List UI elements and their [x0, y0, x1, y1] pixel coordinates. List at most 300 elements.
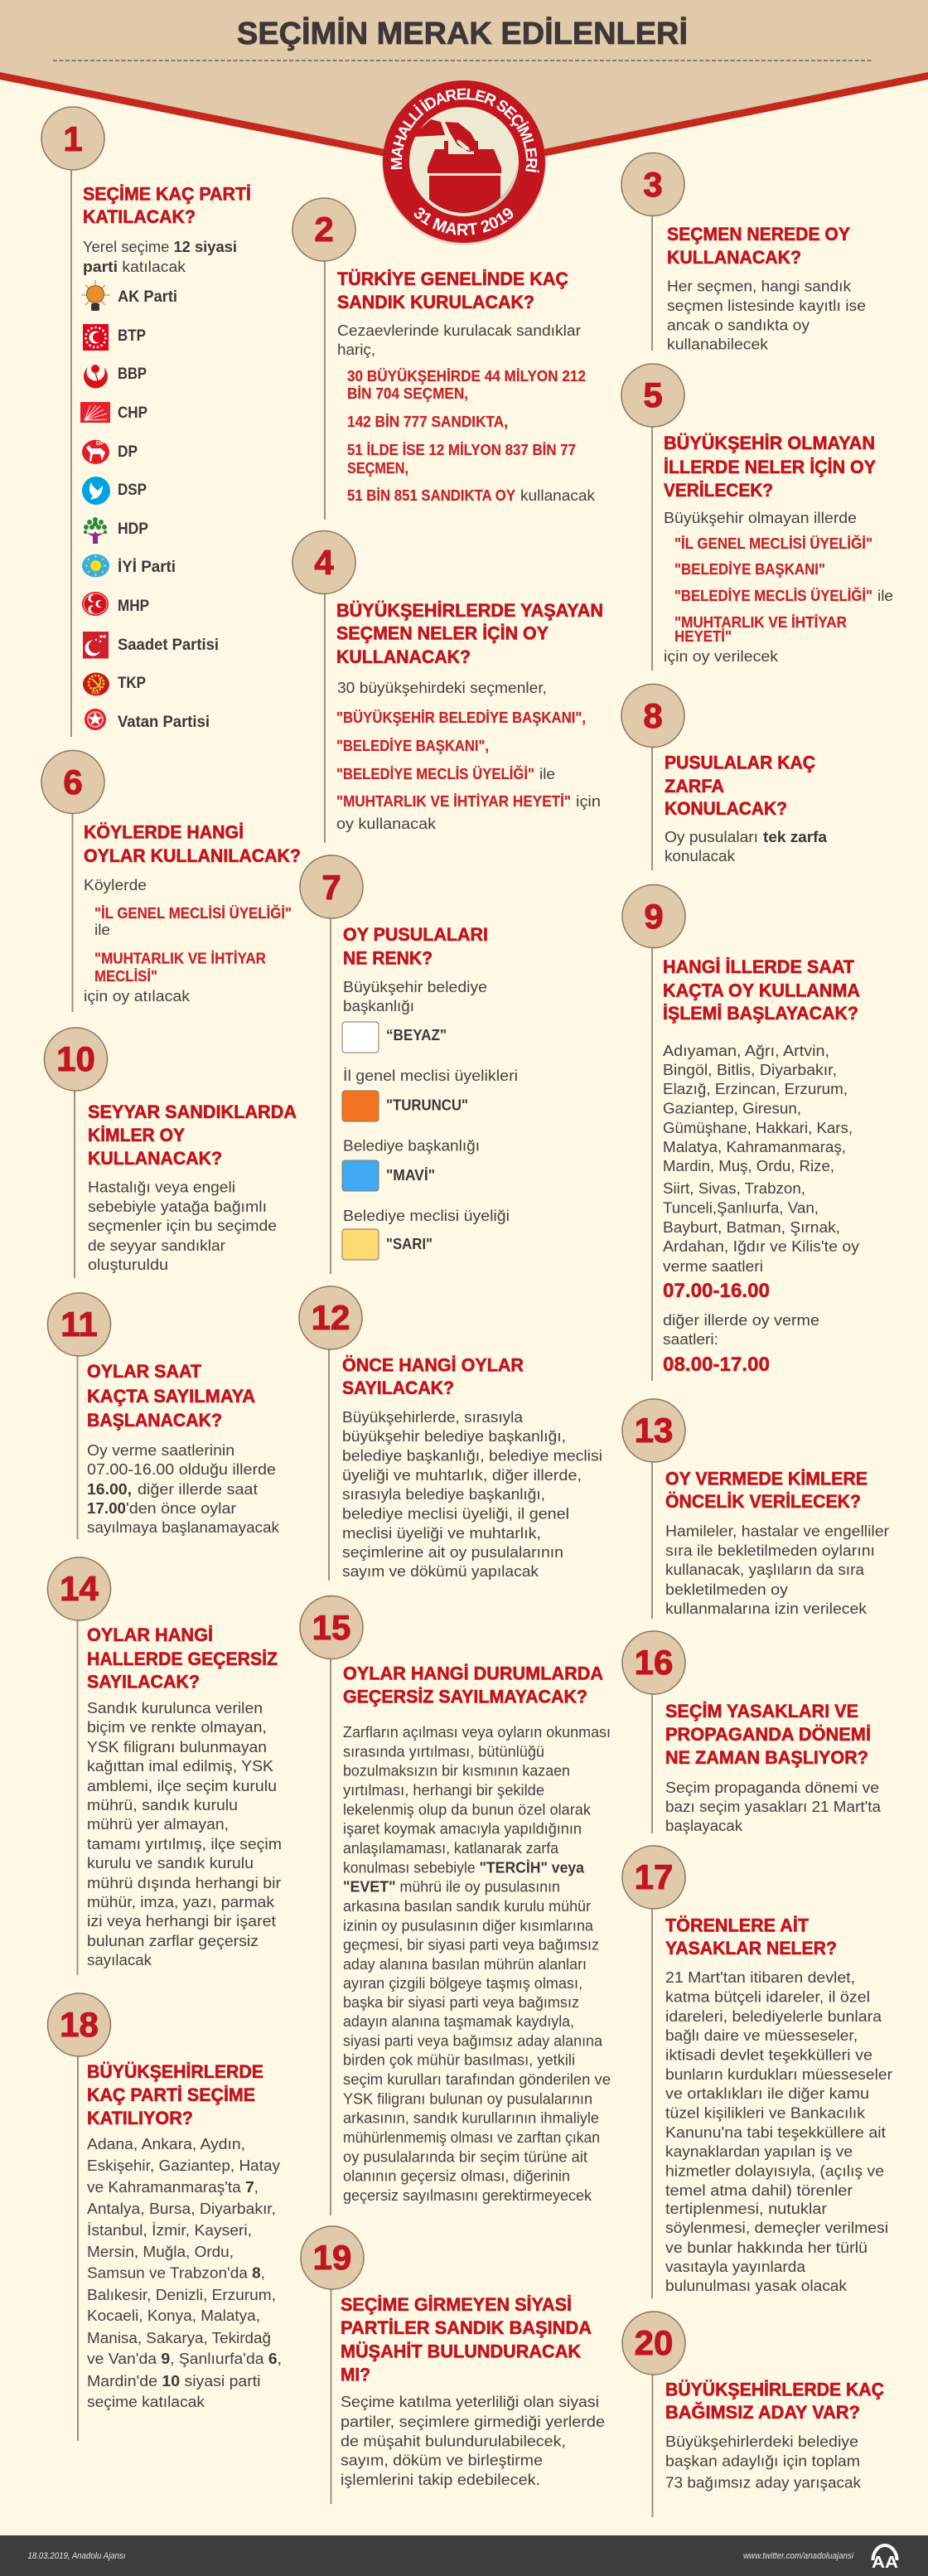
- text 18: Samsun ve Trabzon'da 8,: [87, 2264, 265, 2281]
- party: BTP: [83, 324, 146, 351]
- heading 12: ÖNCE HANGİ OYLAR: [342, 1354, 524, 1376]
- text 10: Hastalığı veya engeli: [88, 1179, 235, 1195]
- number badge 19: [301, 2226, 364, 2289]
- heading 19: SEÇİME GİRMEYEN SİYASİ: [341, 2294, 572, 2315]
- text 17: bağlı daire ve müesseseler,: [665, 2027, 858, 2044]
- text 17: kaynaklardan yapılan iş ve: [665, 2143, 853, 2160]
- text 8: tek zarfa: [763, 829, 828, 845]
- text 9: Mardin, Muş, Ordu, Rize,: [663, 1158, 834, 1174]
- number badge 10: [45, 1028, 108, 1091]
- text 15: Zarfların açılması veya oyların okunması: [343, 1724, 611, 1741]
- header banner: [0, 0, 928, 172]
- text 19: de müşahit bulundurulabilecek,: [341, 2433, 566, 2450]
- swatch: white: [342, 1022, 447, 1053]
- number badge 7: [300, 855, 363, 918]
- text 14: mührü, sandık kurulu: [87, 1797, 238, 1813]
- text 18: Eskişehir, Gaziantep, Hatay: [87, 2157, 280, 2174]
- heading 10: KİMLER OY: [88, 1125, 185, 1145]
- swatch: blue: [342, 1160, 435, 1191]
- text 15: seçim kurulları tarafından gönderilen ve: [343, 2071, 611, 2088]
- party: HDP: [84, 517, 148, 544]
- text 18: Manisa, Sakarya, Tekirdağ: [87, 2330, 271, 2346]
- text 2: 142 BİN 777 SANDIKTA,: [347, 414, 508, 430]
- text 15: bozulmaksızın bir kısmının kazaen: [343, 1762, 570, 1779]
- text 6: MECLİSİ": [94, 968, 157, 985]
- number badge 5: 5: [643, 375, 663, 414]
- heading 2: TÜRKİYE GENELİNDE KAÇ: [337, 269, 568, 289]
- text 3: kullanabilecek: [667, 337, 769, 353]
- text 9: Adıyaman, Ağrı, Artvin,: [663, 1043, 829, 1059]
- number badge 3: [621, 153, 684, 215]
- heading 15: GEÇERSİZ SAYILMAYACAK?: [343, 1686, 587, 1707]
- text 15: sırasında yırtılması, bütünlüğü: [343, 1744, 544, 1760]
- text 10: oluşturuldu: [88, 1257, 168, 1273]
- text 4: "MUHTARLIK VE İHTİYAR HEYETİ": [336, 793, 571, 810]
- heading 9: KAÇTA OY KULLANMA: [663, 980, 860, 1001]
- swatch: blue: "MAVİ": [386, 1167, 435, 1184]
- heading 19: PARTİLER SANDIK BAŞINDA: [341, 2317, 592, 2338]
- text 9: Elazığ, Erzincan, Erzurum,: [663, 1081, 848, 1097]
- text 10: de seyyar sandıklar: [88, 1237, 225, 1254]
- text 12: üyeliği ve muhtarlık, diğer illerde,: [342, 1467, 582, 1484]
- title: SEÇİMİN MERAK EDİLENLERİ: [237, 17, 688, 51]
- heading 3: [667, 224, 850, 268]
- party: DSP: [82, 477, 147, 505]
- party: Saadet: [83, 632, 219, 658]
- swatch: yellow: [342, 1229, 433, 1260]
- text 9: Gümüşhane, Hakkari, Kars,: [663, 1120, 853, 1136]
- text 12: belediye başkanlığı, belediye meclisi: [342, 1447, 602, 1464]
- heading 4: [336, 600, 603, 667]
- panel: question 11: [48, 1293, 280, 1539]
- swatch: orange: "TURUNCU": [386, 1097, 468, 1114]
- text 15: olanının geçersiz olması, diğerinin: [343, 2168, 570, 2185]
- text 9: Gaziantep, Giresun,: [663, 1101, 801, 1117]
- party: BTP: BTP: [118, 327, 146, 345]
- party: Vatan: [85, 709, 210, 731]
- number badge 4: [292, 530, 355, 593]
- text 17: söylenmesi, demeçler verilmesi: [665, 2220, 888, 2236]
- heading 12: [342, 1354, 524, 1398]
- text 12: Büyükşehirlerde, sırasıyla: [342, 1409, 524, 1426]
- number badge 6: 6: [63, 763, 83, 801]
- text 12: sayım ve dökümü yapılacak: [342, 1563, 539, 1580]
- panel: question 8: [621, 685, 828, 870]
- text 18: Kocaeli, Konya, Malatya,: [87, 2307, 260, 2324]
- text 18: ve Kahramanmaraş'ta 7,: [87, 2179, 259, 2196]
- heading 5: BÜYÜKŞEHİR OLMAYAN: [664, 433, 875, 453]
- text 14: mührü dışında herhangi bir: [87, 1875, 281, 1891]
- text 4: "BÜYÜKŞEHİR BELEDİYE BAŞKANI",: [336, 709, 586, 726]
- number badge 17: [622, 1846, 685, 1909]
- text 12: [342, 1409, 602, 1580]
- text 13: bekletilmeden oy: [665, 1581, 788, 1598]
- panel: question 4: [292, 530, 603, 843]
- number badge 17: 17: [635, 1857, 673, 1896]
- text 1: Yerel seçime 12 siyasi: [83, 239, 237, 255]
- text 3: seçmen listesinde kayıtlı ise: [667, 298, 866, 314]
- number badge 5: [621, 364, 684, 427]
- panel: question 18: [48, 1993, 282, 2441]
- text 14: sayılacak: [87, 1952, 152, 1968]
- text 9: [663, 1043, 859, 1376]
- text: provincial council ballot: İl genel meclisi üyelikleri: [343, 1068, 518, 1084]
- panel: question 2: [292, 198, 596, 520]
- text 15: geçersiz sayılmasını gerektirmeyecek: [343, 2187, 592, 2204]
- text 17: tertiplenmesi, nutuklar: [665, 2201, 827, 2217]
- heading 18: KATILIYOR?: [87, 2108, 193, 2128]
- heading 20: BÜYÜKŞEHİRLERDE KAÇ: [665, 2379, 884, 2400]
- text 16: başlayacak: [665, 1818, 743, 1834]
- text 3: ancak o sandıkta oy: [667, 317, 810, 333]
- text 17: idareleri, belediyelerle bunlara: [665, 2008, 882, 2025]
- heading 7: NE RENK?: [343, 948, 433, 968]
- swatch: orange: [342, 1091, 468, 1121]
- number badge 16: 16: [635, 1643, 673, 1682]
- number badge 7: 7: [321, 868, 341, 907]
- number badge 11: 11: [60, 1305, 98, 1344]
- text 15: aday alanına basılan mührün alanları: [343, 1956, 587, 1973]
- heading 14: OYLAR HANGİ: [87, 1625, 213, 1645]
- number badge 14: [48, 1557, 111, 1620]
- text 12: belediye meclisi üyeliği, il genel: [342, 1505, 569, 1522]
- number badge 9: 9: [644, 897, 664, 936]
- number badge 19: 19: [313, 2238, 351, 2277]
- text 5: Büyükşehir olmayan illerde: [664, 510, 857, 526]
- text 16: bazı seçim yasakları 21 Mart'ta: [665, 1799, 882, 1815]
- text 9: 08.00-17.00: [663, 1353, 770, 1376]
- text 4: "BELEDİYE MECLİS ÜYELİĞİ": [336, 765, 534, 782]
- text 16: Seçim propaganda dönemi ve: [665, 1779, 879, 1796]
- text 2: 51 BİN 851 SANDIKTA OY: [347, 487, 515, 504]
- swatch: white: “BEYAZ": [386, 1027, 447, 1043]
- text 8: konulacak: [665, 848, 736, 864]
- party: AK Parti: AK Parti: [118, 288, 177, 306]
- heading 16: [665, 1701, 871, 1768]
- heading 7: OY PUSULALARI: [343, 924, 488, 945]
- party: IYI: [82, 554, 176, 577]
- text 15: siyasi parti veya bağımsız aday alanına: [343, 2032, 603, 2049]
- text 5: HEYETİ": [674, 628, 732, 645]
- text 14: [87, 1700, 282, 1968]
- text 14: izi veya herhangi bir işaret: [87, 1913, 276, 1930]
- text 14: YSK filigranı bulunmayan: [87, 1739, 267, 1755]
- heading 14: HALLERDE GEÇERSİZ: [87, 1649, 278, 1669]
- text 15: anlaşılamaması, katlanarak zarfa: [343, 1840, 559, 1857]
- text: metropolitan mayor ballot: Büyükşehir belediye: [343, 979, 487, 995]
- text 17: bulunulması yasak olacak: [665, 2278, 848, 2294]
- party: Vatan: Vatan Partisi: [118, 714, 210, 731]
- text 14: mühür, imza, yazı, parmak: [87, 1894, 275, 1910]
- text 2: 51 İLDE İSE 12 MİLYON 837 BİN 77: [347, 442, 576, 458]
- text 15: YSK filigranı bulunan oy pusulalarının: [343, 2090, 592, 2107]
- text 14: mührü yer almayan,: [87, 1816, 229, 1833]
- text 18: ve Van'da 9, Şanlıurfa'da 6,: [87, 2351, 282, 2367]
- text 15: mühürlenmemiş olması ve zarftan çıkan: [343, 2129, 600, 2146]
- text 17: katma bütçeli idareler, il özel: [665, 1989, 870, 2006]
- panel: question 10: [45, 1028, 297, 1278]
- text 6: ile: [94, 922, 110, 938]
- heading 11: [87, 1361, 255, 1431]
- heading 16: NE ZAMAN BAŞLIYOR?: [665, 1747, 868, 1768]
- heading 5: İLLERDE NELER İÇİN OY: [664, 457, 876, 477]
- heading 11: KAÇTA SAYILMAYA: [87, 1386, 255, 1407]
- text 13: kullanmalarına izin verilecek: [665, 1600, 868, 1617]
- text 20: 73 bağımsız aday yarışacak: [665, 2475, 862, 2491]
- panel: question 15: [300, 1596, 611, 2215]
- party: TKP: TKP: [91, 691, 100, 696]
- number badge 2: [292, 198, 355, 261]
- text 12: meclisi üyeliği ve muhtarlık,: [342, 1525, 541, 1542]
- heading 20: BAĞIMSIZ ADAY VAR?: [665, 2402, 860, 2423]
- text 6: için oy atılacak: [84, 988, 191, 1005]
- heading 14: SAYILACAK?: [87, 1671, 200, 1692]
- text 4: ile: [539, 766, 555, 782]
- text 17: 21 Mart'tan itibaren devlet,: [665, 1969, 855, 1986]
- heading 1: SEÇİME KAÇ PARTİ: [83, 184, 251, 204]
- panel: question 13: [622, 1399, 889, 1619]
- heading 19: MÜŞAHİT BULUNDURACAK: [341, 2341, 582, 2362]
- text 19: [341, 2394, 605, 2488]
- text 3: Her seçmen, hangi sandık: [667, 278, 852, 295]
- text 14: biçim ve renkte olmayan,: [87, 1719, 267, 1736]
- text 17: [665, 1969, 892, 2294]
- number badge 2: 2: [314, 210, 334, 249]
- heading 8: [665, 753, 815, 819]
- text 15: ayıran çizgili bölgeye taşmış olması,: [343, 1975, 582, 1992]
- heading 13: [665, 1469, 868, 1512]
- party: BBP: [84, 363, 147, 388]
- text 2: BİN 704 SEÇMEN,: [347, 385, 468, 402]
- heading 4: SEÇMEN NELER İÇİN OY: [336, 623, 549, 643]
- text 4: için: [576, 793, 601, 810]
- text 12: büyükşehir belediye başkanlığı,: [342, 1428, 566, 1445]
- text 1: parti katılacak: [83, 259, 186, 275]
- party: BBP: BBP: [118, 366, 147, 383]
- text 18: Balıkesir, Denizli, Erzurum,: [87, 2287, 276, 2303]
- text 6: Köylerde: [84, 877, 147, 893]
- text 13: kullanacak, yaşlıların da sıra: [665, 1562, 865, 1578]
- text 13: sıra ile bekletilmeden oylarını: [665, 1542, 875, 1559]
- text 4: 30 büyükşehirdeki seçmenler,: [337, 680, 547, 696]
- text: metropolitan mayor ballot: [343, 979, 487, 1014]
- panel: question 17: [622, 1846, 892, 2298]
- text 2: kullanacak: [520, 487, 596, 504]
- heading 11: BAŞLANACAK?: [87, 1410, 222, 1431]
- text: mayor ballot: Belediye başkanlığı: [343, 1137, 480, 1154]
- text 11: 17.00: [87, 1500, 126, 1517]
- party: TKP: TKP: [118, 675, 146, 692]
- heading 17: [665, 1915, 837, 1959]
- text 4: "BELEDİYE BAŞKANI",: [336, 738, 489, 754]
- text: municipal council ballot: Belediye meclisi üyeliği: [343, 1208, 510, 1224]
- text 5: "BELEDİYE MECLİS ÜYELİĞİ": [674, 587, 872, 604]
- text 17: bunların kurdukları müesseseler: [665, 2066, 892, 2083]
- heading 4: BÜYÜKŞEHİRLERDE YAŞAYAN: [336, 600, 603, 621]
- text 6: "MUHTARLIK VE İHTİYAR: [94, 950, 266, 966]
- text 15: geçmesi, bir siyasi parti veya bağımsız: [343, 1936, 599, 1953]
- text 6: [84, 877, 292, 1005]
- icon: AA logo: [872, 2545, 898, 2572]
- text 13: [665, 1523, 889, 1617]
- text 11: [87, 1442, 280, 1536]
- number badge 15: 15: [312, 1608, 350, 1647]
- text 18: [87, 2136, 282, 2410]
- panel: question 1: [41, 107, 251, 737]
- text 18: Mardin'de 10 siyasi parti: [87, 2373, 260, 2390]
- text 2: hariç,: [337, 341, 375, 358]
- text 15: konulması sebebiyle "TERCİH" veya: [343, 1860, 585, 1876]
- heading 9: [663, 956, 860, 1024]
- heading 13: ÖNCELİK VERİLECEK?: [665, 1491, 861, 1512]
- text 9: diğer illerde oy verme: [663, 1312, 819, 1329]
- heading 10: [88, 1102, 297, 1169]
- heading 18: [87, 2061, 263, 2128]
- text 13: Hamileler, hastalar ve engelliler: [665, 1523, 889, 1540]
- text 1: [83, 239, 237, 275]
- badge: local elections 31 March 2019 with ballot box: 31 MART 2019: [414, 207, 514, 235]
- text 15: [343, 1724, 611, 2204]
- text 5: "BELEDİYE BAŞKANI": [674, 561, 825, 578]
- party: DSP: DSP: [118, 482, 147, 499]
- footer bar: [0, 2535, 928, 2576]
- heading 8: KONULACAK?: [665, 798, 787, 819]
- party: IYI: İYİ Parti: [118, 559, 176, 576]
- number badge 3: 3: [643, 165, 663, 204]
- text 18: Mersin, Muğla, Ordu,: [87, 2244, 234, 2260]
- heading 19: [341, 2294, 592, 2385]
- text 4: [336, 680, 601, 832]
- text 18: seçime katılacak: [87, 2394, 205, 2410]
- text 2: [337, 322, 596, 504]
- text 17: hizmetler dolayısıyla, (açılış ve: [665, 2163, 884, 2180]
- party: DP: DP: [96, 441, 104, 447]
- text 14: tamamı yırtılmış, ilçe seçim: [87, 1836, 282, 1852]
- text 20: başkan adaylığı için toplam: [665, 2453, 860, 2470]
- heading 8: PUSULALAR KAÇ: [665, 753, 815, 772]
- text 17: tüzel kişilikleri ve Bankacılık: [665, 2105, 866, 2122]
- text 17: Kanunu'na tabi teşekküllere ait: [665, 2124, 886, 2141]
- footer link: www.twitter.com/anadoluajansi: [743, 2551, 853, 2561]
- text 15: izinin oy pusulasının diğer kısımlarına: [343, 1918, 594, 1934]
- text 4: oy kullanacak: [336, 816, 437, 832]
- text 15: "EVET" mührü ile oy pusulasının: [343, 1878, 560, 1895]
- heading 19: MI?: [341, 2364, 370, 2385]
- text 5: [664, 510, 893, 665]
- party: DP: [82, 440, 138, 464]
- text 18: Adana, Ankara, Aydın,: [87, 2136, 245, 2152]
- heading 13: OY VERMEDE KİMLERE: [665, 1469, 868, 1489]
- heading 15: [343, 1663, 603, 1707]
- heading 7: [343, 924, 488, 968]
- heading 17: YASAKLAR NELER?: [665, 1938, 837, 1959]
- text 15: adayın alanına taşmamak kaydıyla,: [343, 2013, 574, 2030]
- text 9: Siirt, Sivas, Trabzon,: [663, 1180, 805, 1197]
- swatch: yellow: "SARI": [386, 1236, 433, 1252]
- text 14: bulunan zarflar geçersiz: [87, 1933, 259, 1949]
- number badge 16: [622, 1631, 685, 1694]
- text 16: [665, 1779, 882, 1834]
- text 6: "İL GENEL MECLİSİ ÜYELİĞİ": [94, 904, 292, 922]
- text 17: temel atma dahil) törenler: [665, 2182, 853, 2199]
- party: MHP: MHP: [118, 598, 149, 615]
- text 14: Sandık kurulunca verilen: [87, 1700, 263, 1717]
- number badge 18: [48, 1993, 111, 2056]
- text 17: iktisadi devlet teşekkülleri ve: [665, 2047, 872, 2064]
- badge: local elections 31 March 2019 with ballot box: MAHALLİ İDARELER SEÇİMLERİ: [391, 88, 539, 172]
- text: metropolitan mayor ballot: başkanlığı: [343, 998, 414, 1014]
- number badge 1: [41, 107, 104, 170]
- number badge 8: [621, 685, 684, 748]
- text 5: için oy verilecek: [664, 648, 779, 665]
- party: CHP: CHP: [118, 404, 147, 422]
- text 15: birden çok mühür basılması, yetkili: [343, 2052, 575, 2069]
- text 19: partiler, seçimlere girmediği yerlerde: [341, 2414, 605, 2430]
- text 9: verme saatleri: [663, 1258, 763, 1275]
- heading 1: KATILACAK?: [83, 206, 196, 227]
- heading 3: KULLANACAK?: [667, 247, 801, 268]
- number badge 20: 20: [635, 2323, 673, 2362]
- text 9: Bayburt, Batman, Şırnak,: [663, 1219, 840, 1236]
- text 15: lekelenmiş olup da bunun özel olarak: [343, 1802, 592, 1818]
- text 11: diğer illerde saat: [138, 1481, 258, 1498]
- number badge 4: 4: [314, 543, 334, 582]
- heading 14: [87, 1625, 278, 1692]
- text 5: "İL GENEL MECLİSİ ÜYELİĞİ": [674, 535, 872, 552]
- text 15: arkasının, sandık kurullarının ihmaliyle: [343, 2110, 599, 2127]
- number badge 10: 10: [56, 1039, 95, 1078]
- text 11: 07.00-16.00 olduğu illerde: [87, 1461, 276, 1478]
- text 9: Tunceli,Şanlıurfa, Van,: [663, 1200, 819, 1217]
- text 15: oy pusulalarında bir seçim türüne ait: [343, 2148, 587, 2165]
- number badge 8: 8: [643, 696, 663, 735]
- heading 6: OYLAR KULLANILACAK?: [84, 845, 301, 866]
- text 10: seçmenler için bu seçimde: [88, 1218, 277, 1234]
- number badge 20: [622, 2312, 685, 2375]
- party: TKP: [83, 673, 146, 696]
- text 9: 07.00-16.00: [663, 1280, 770, 1302]
- text 19: işlemlerini takip edebilecek.: [341, 2472, 540, 2488]
- text 9: Malatya, Kahramanmaraş,: [663, 1139, 846, 1155]
- text 11: sayılmaya başlanamayacak: [87, 1519, 280, 1536]
- heading 18: BÜYÜKŞEHİRLERDE: [87, 2061, 263, 2082]
- heading 16: SEÇİM YASAKLARI VE: [665, 1701, 858, 1721]
- text 15: arkasına basılan sandık kurulu mühür: [343, 1898, 591, 1915]
- text 11: 'den önce oylar: [126, 1500, 236, 1517]
- heading 10: KULLANACAK?: [88, 1148, 222, 1169]
- number badge 6: [41, 751, 104, 814]
- text 2: 30 BÜYÜKŞEHİRDE 44 MİLYON 212: [347, 368, 586, 385]
- text 17: ve bunlar hakkında her türlü: [665, 2239, 868, 2256]
- icon: AA logo: AA: [872, 2554, 898, 2572]
- panel: question 3: [621, 153, 866, 353]
- text 10: sebebiyle yatağa bağımlı: [88, 1198, 267, 1215]
- party: CHP: [80, 402, 147, 423]
- badge: local elections 31 March 2019 with ballot box: [382, 80, 546, 245]
- heading 1: [83, 184, 251, 227]
- text 12: sırasıyla belediye başkanlığı,: [342, 1486, 545, 1503]
- text 3: [667, 278, 866, 353]
- number badge 18: 18: [60, 2005, 99, 2044]
- text 11: Oy verme saatlerinin: [87, 1442, 234, 1459]
- heading 3: SEÇMEN NEREDE OY: [667, 224, 850, 245]
- text 8: Oy pusulaları: [665, 829, 758, 845]
- text 19: Seçime katılma yeterliliği olan siyasi: [341, 2394, 599, 2410]
- footer credit: 18.03.2019, Anadolu Ajansı: [28, 2551, 126, 2561]
- number badge 1: 1: [63, 119, 83, 158]
- number badge 12: 12: [312, 1298, 350, 1337]
- text 9: Ardahan, Iğdır ve Kilis'te oy: [663, 1238, 859, 1255]
